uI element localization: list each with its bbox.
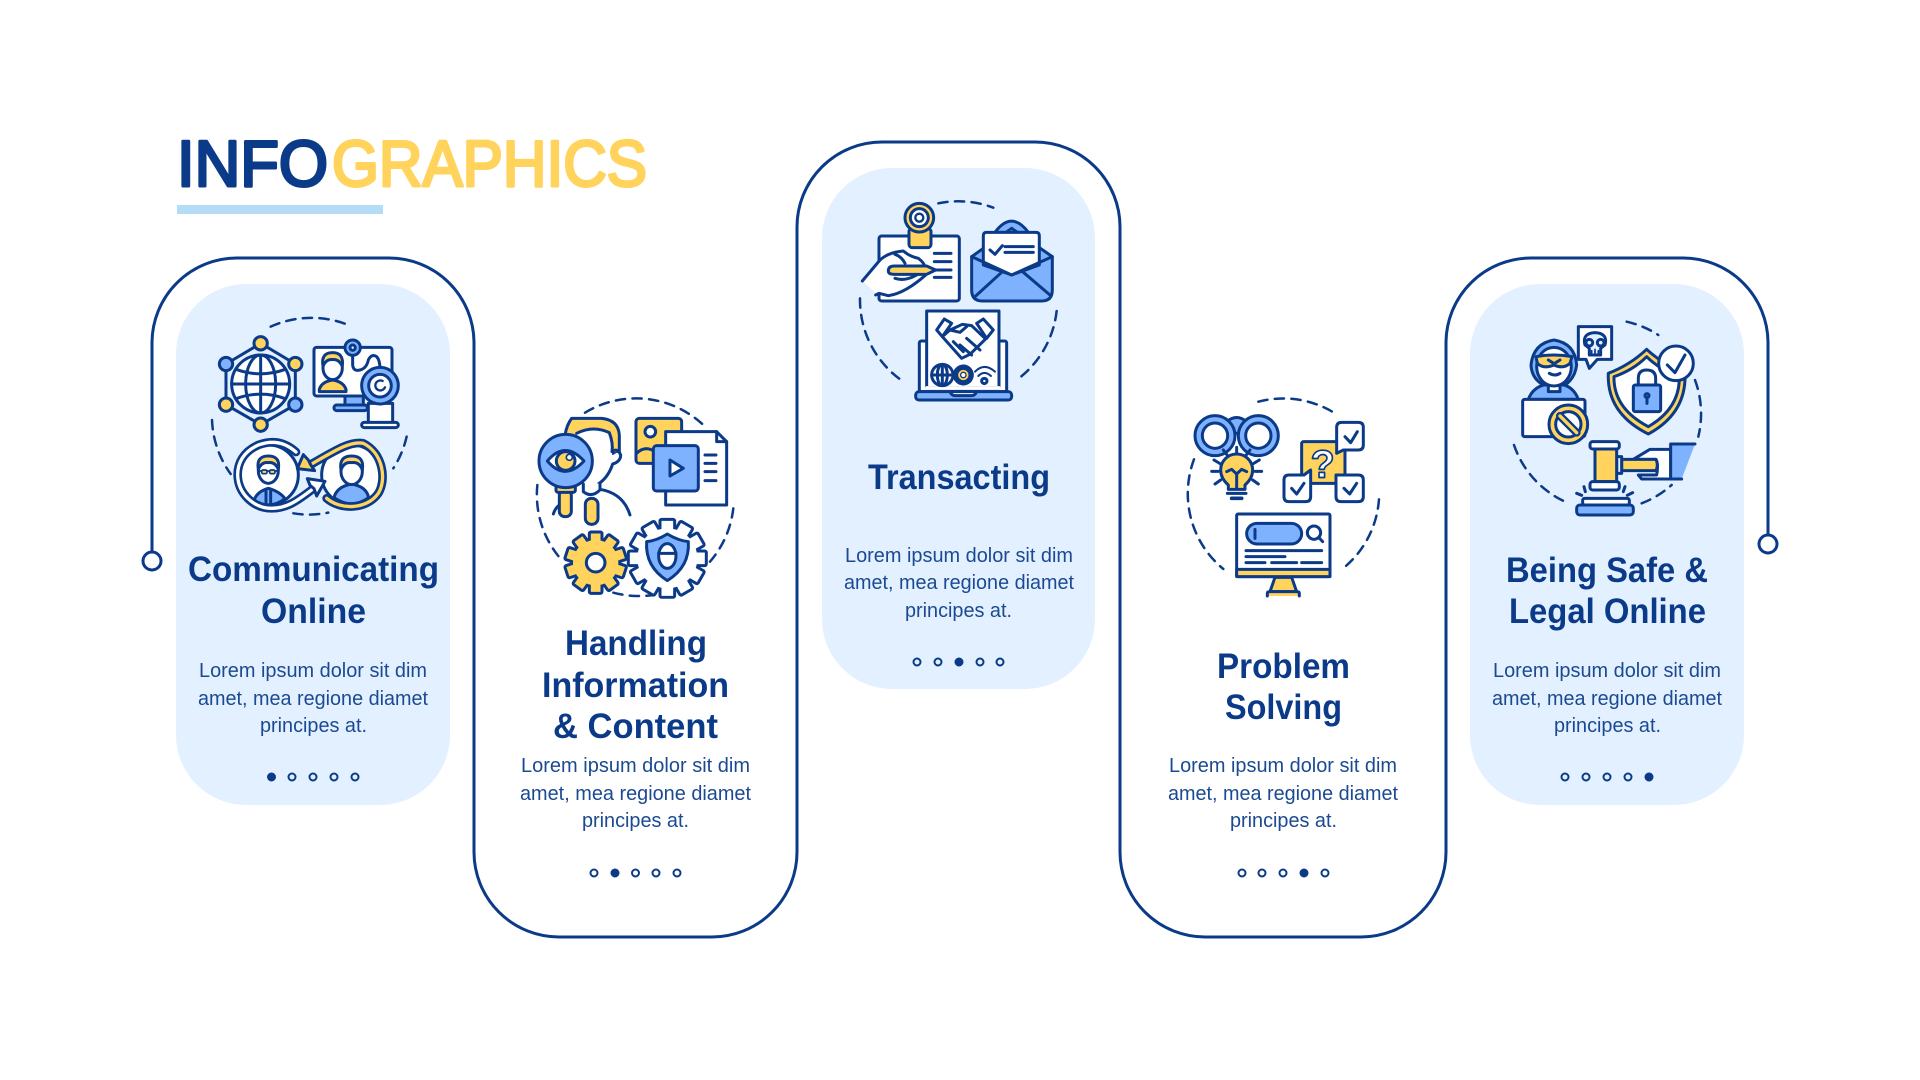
pager dots: step 4 bbox=[1238, 870, 1328, 876]
panel: handling information and content bbox=[520, 398, 751, 876]
panel fill: transacting bbox=[822, 168, 1095, 689]
heading: problem solving bbox=[1217, 647, 1350, 727]
icon: problem solving bbox=[1188, 398, 1379, 596]
panel: problem solving bbox=[1168, 398, 1398, 876]
body text: transacting: amet, mea regione diamet bbox=[844, 572, 1074, 594]
heading: problem solving: Problem bbox=[1217, 647, 1350, 686]
panel: transacting bbox=[844, 201, 1074, 665]
body text: problem solving bbox=[1168, 755, 1398, 832]
body text: problem solving: Lorem ipsum dolor sit dim bbox=[1169, 755, 1397, 777]
body text: being safe and legal online: amet, mea regione diamet bbox=[1492, 688, 1722, 710]
heading: communicating online: Online bbox=[261, 592, 366, 631]
title: INFO bbox=[177, 127, 328, 200]
icon: handling information and content bbox=[537, 398, 733, 597]
body text: transacting: Lorem ipsum dolor sit dim bbox=[845, 545, 1073, 567]
panel fill: communicating online bbox=[176, 284, 450, 805]
body text: handling information and content bbox=[520, 755, 751, 832]
body text: communicating online: Lorem ipsum dolor sit dim bbox=[199, 660, 427, 682]
pager dots: step 1 bbox=[268, 774, 358, 780]
heading: problem solving: Solving bbox=[1225, 688, 1342, 727]
panel fill: being safe and legal online bbox=[1470, 284, 1744, 805]
body text: communicating online: amet, mea regione diamet bbox=[198, 688, 428, 710]
connected panel outline bbox=[143, 142, 1777, 937]
body text: problem solving: principes at. bbox=[1230, 810, 1337, 832]
body text: handling information and content: amet, mea regione diamet bbox=[520, 783, 751, 805]
heading: communicating online bbox=[188, 550, 439, 631]
body text: communicating online bbox=[198, 660, 428, 737]
heading: being safe and legal online: Legal Online bbox=[1509, 592, 1706, 631]
heading: handling information and content: Handling bbox=[565, 624, 707, 663]
heading: handling information and content bbox=[542, 624, 729, 746]
body text: problem solving: amet, mea regione diamet bbox=[1168, 783, 1398, 805]
icon: problem solving: ? bbox=[1311, 442, 1335, 486]
heading: transacting: Transacting bbox=[868, 458, 1050, 497]
heading: handling information and content: Information bbox=[542, 666, 729, 705]
heading: being safe and legal online: Being Safe & bbox=[1506, 551, 1708, 590]
heading: being safe and legal online bbox=[1506, 551, 1708, 631]
body text: being safe and legal online: principes at. bbox=[1554, 715, 1661, 737]
body text: communicating online: principes at. bbox=[260, 715, 367, 737]
title underline bbox=[177, 205, 383, 214]
heading: handling information and content: & Content bbox=[553, 707, 718, 746]
icon: being safe and legal online bbox=[1514, 322, 1701, 515]
icon: communicating online bbox=[212, 318, 407, 515]
body text: handling information and content: Lorem ipsum dolor sit dim bbox=[521, 755, 750, 777]
body text: being safe and legal online bbox=[1492, 660, 1722, 737]
title: GRAPHICS bbox=[332, 127, 647, 200]
body text: transacting: principes at. bbox=[905, 600, 1012, 622]
pager dots: step 2 bbox=[590, 870, 680, 876]
body text: handling information and content: principes at. bbox=[582, 810, 689, 832]
pager dots: step 5 bbox=[1562, 774, 1652, 780]
icon: transacting bbox=[860, 201, 1057, 400]
body text: being safe and legal online: Lorem ipsum dolor sit dim bbox=[1493, 660, 1721, 682]
title bbox=[177, 127, 647, 214]
heading: communicating online: Communicating bbox=[188, 550, 439, 589]
panel: being safe and legal online bbox=[1492, 322, 1722, 780]
body text: transacting bbox=[844, 545, 1074, 622]
pager dots: step 3 bbox=[914, 658, 1004, 666]
panel: communicating online bbox=[188, 318, 439, 780]
